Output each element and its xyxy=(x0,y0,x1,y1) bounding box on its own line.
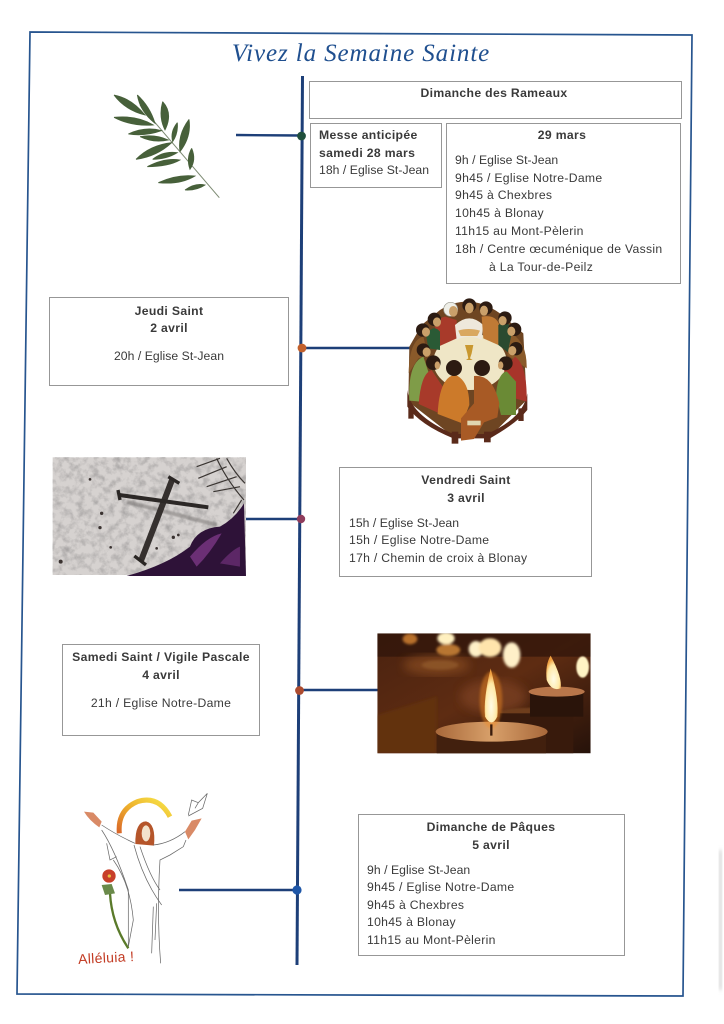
panel: Vendredi Saint: 15h / Eglise St-Jean xyxy=(349,516,459,530)
panel: Dimanche des Rameaux heading xyxy=(310,82,682,118)
panel: Messe anticipée: 18h / Eglise St-Jean xyxy=(319,163,429,177)
image: candles xyxy=(377,632,591,755)
panel: Vendredi Saint: 15h / Eglise Notre-Dame xyxy=(349,533,489,547)
panel: 29 mars: 9h45 / Eglise Notre-Dame xyxy=(455,171,602,185)
panel: Dimanche des Rameaux heading: Dimanche des Rameaux xyxy=(420,86,568,100)
panel: 29 mars: 9h / Eglise St-Jean xyxy=(455,153,558,167)
panel: Messe anticipée: Messe anticipée xyxy=(319,128,418,142)
panel: 29 mars: 10h45 à Blonay xyxy=(455,206,545,220)
scan shadow on right edge xyxy=(719,850,722,990)
panel: Samedi Saint: 21h / Eglise Notre-Dame xyxy=(91,696,231,710)
timeline axis xyxy=(297,76,302,965)
panel: Messe anticipée xyxy=(310,124,442,188)
icon: olive branch xyxy=(114,95,219,198)
image: nails cross on stone xyxy=(53,457,246,576)
panel: 29 mars: 29 mars xyxy=(538,128,586,142)
panel: Dimanche de Pâques: 10h45 à Blonay xyxy=(367,915,457,929)
title: Vivez la Semaine Sainte xyxy=(232,40,490,67)
panel: 29 mars: 18h / Centre œcuménique de Vassin xyxy=(455,242,662,256)
panel: Jeudi Saint: Jeudi Saint xyxy=(135,304,203,318)
panel: Dimanche de Pâques: 9h45 à Chexbres xyxy=(367,898,464,912)
panel: Jeudi Saint: 20h / Eglise St-Jean xyxy=(114,349,224,363)
panel: Dimanche de Pâques: Dimanche de Pâques xyxy=(427,820,555,834)
panel: Messe anticipée: samedi 28 mars xyxy=(319,146,415,160)
panel: 29 mars: 9h45 à Chexbres xyxy=(455,188,552,202)
connector: Jeudi Saint xyxy=(298,344,410,352)
panel: Dimanche de Pâques xyxy=(358,814,624,956)
panel: Jeudi Saint: 2 avril xyxy=(150,321,188,335)
panel: Samedi Saint xyxy=(62,644,260,736)
icon: risen Christ with Alleluia: Alléluia ! xyxy=(78,948,135,967)
panel: 29 mars: à La Tour-de-Peilz xyxy=(489,260,593,274)
panel: Vendredi Saint: 3 avril xyxy=(447,491,485,505)
panel: Dimanche de Pâques: 5 avril xyxy=(472,838,510,852)
panel: Vendredi Saint xyxy=(340,468,592,576)
panel: Samedi Saint: 4 avril xyxy=(142,668,180,682)
connector: Rameaux xyxy=(236,132,306,140)
panel: Vendredi Saint: Vendredi Saint xyxy=(421,473,511,487)
panel: Dimanche de Pâques: 9h / Eglise St-Jean xyxy=(367,863,470,877)
panel: Jeudi Saint xyxy=(50,298,288,386)
connector: Samedi Saint xyxy=(295,686,378,695)
panel: Samedi Saint: Samedi Saint / Vigile Pascale xyxy=(72,650,250,664)
connector: Vendredi Saint xyxy=(246,515,305,523)
icon: Last Supper illustration xyxy=(407,298,527,444)
panel: Dimanche de Pâques: 11h15 au Mont-Pèlerin xyxy=(367,933,496,947)
panel: 29 mars: 11h15 au Mont-Pèlerin xyxy=(455,224,584,238)
panel: Dimanche de Pâques: 9h45 / Eglise Notre-Dame xyxy=(367,880,514,894)
panel: 29 mars xyxy=(446,124,680,284)
connector: Pâques xyxy=(179,885,302,895)
panel: Vendredi Saint: 17h / Chemin de croix à Blonay xyxy=(349,551,528,565)
icon: risen Christ with Alleluia xyxy=(78,793,207,967)
